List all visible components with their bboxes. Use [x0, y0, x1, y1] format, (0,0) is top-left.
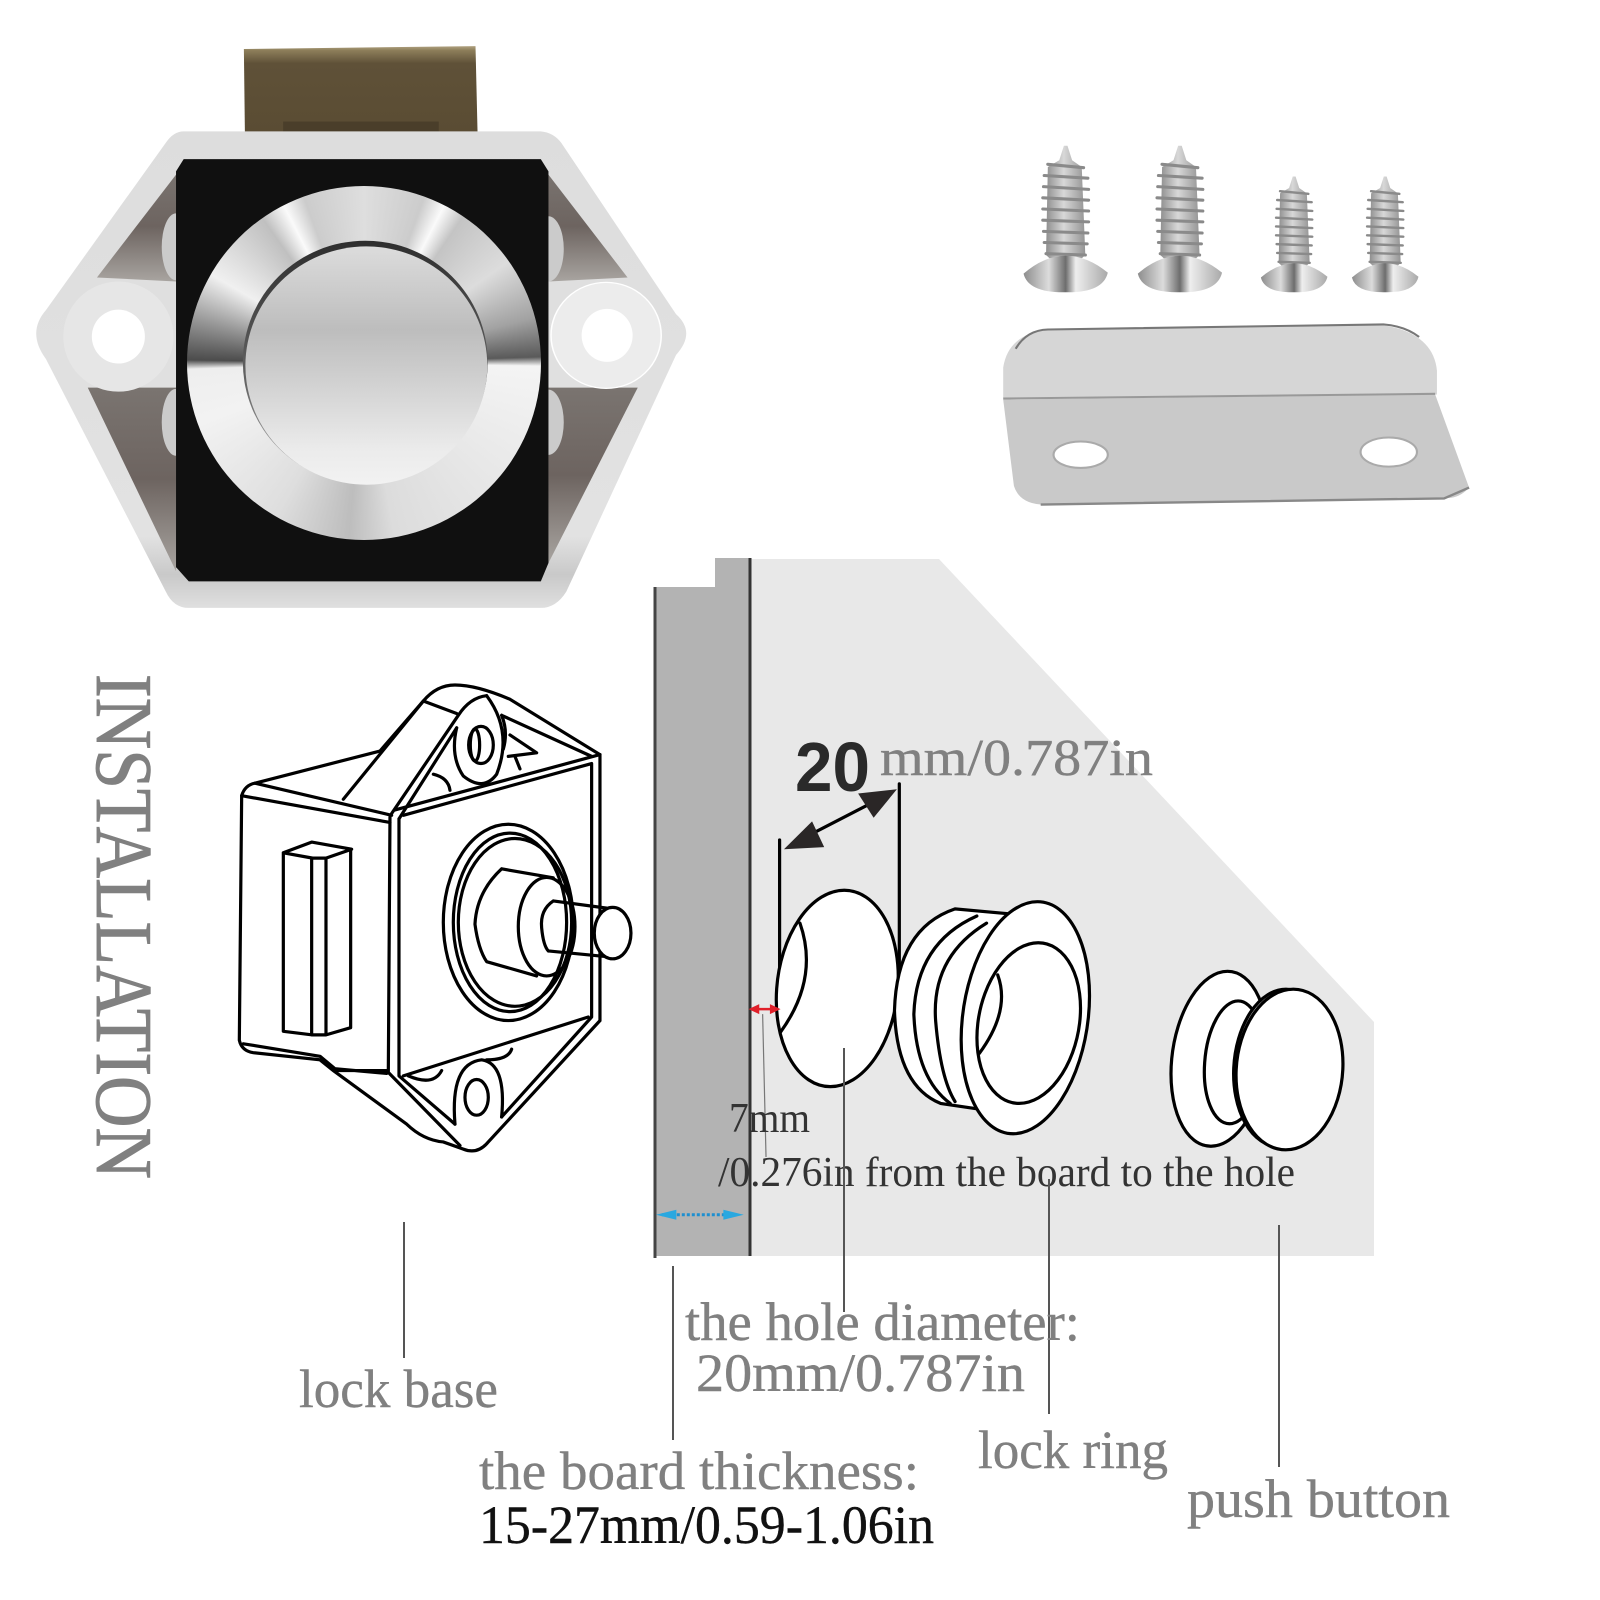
chrome ring [187, 186, 541, 540]
blue thickness arrow [656, 1210, 744, 1220]
vertical heading: installation: INSTALLATION [79, 674, 167, 1179]
photo: push button lock, front view [36, 46, 686, 608]
label: board thickness: 15-27mm/0.59-1.06in [479, 1495, 934, 1555]
board cross section [655, 558, 750, 1258]
dimension: 20: 20 [795, 728, 870, 806]
label: lock ring: lock ring [978, 1420, 1168, 1480]
dimension lines [780, 784, 899, 982]
left screw ear [63, 282, 173, 392]
label: board thickness [479, 1441, 934, 1555]
rivets [162, 213, 564, 456]
mounting hole [770, 890, 905, 1087]
red 7mm arrow [749, 1004, 781, 1014]
push button [1163, 971, 1347, 1150]
sliding bolt [283, 842, 352, 1035]
chrome button [243, 241, 488, 485]
lock housing [36, 131, 686, 608]
exploded drawing: hole, lock ring, push button [656, 784, 1347, 1220]
label: hole diameter [685, 1292, 1080, 1403]
callout lines [404, 1048, 1279, 1467]
screws [1024, 146, 1418, 292]
lock ring [894, 902, 1100, 1134]
label: hole diameter: the hole diameter: [685, 1292, 1080, 1352]
lock bolt [244, 46, 478, 133]
label: lock base: lock base [299, 1359, 498, 1419]
line drawing: lock base [239, 685, 631, 1151]
recesses [88, 171, 638, 571]
label: hole diameter: 20mm/0.787in [696, 1343, 1025, 1403]
label: board thickness: the board thickness: [479, 1441, 919, 1501]
dimension: mm/0.787in: mm/0.787in [880, 730, 1153, 787]
black faceplate [176, 159, 548, 581]
bracket [1003, 324, 1469, 505]
photo: mounting screws and bracket [1003, 146, 1469, 505]
panel: light grey installation surface [750, 559, 1374, 1256]
note: 7mm: 7mm [729, 1096, 810, 1142]
7mm leader [763, 1014, 766, 1157]
right screw ear [551, 282, 661, 388]
note: from the board to the hole: /0.276in from the board to the hole [718, 1150, 1295, 1196]
label: push button: push button [1187, 1469, 1450, 1529]
